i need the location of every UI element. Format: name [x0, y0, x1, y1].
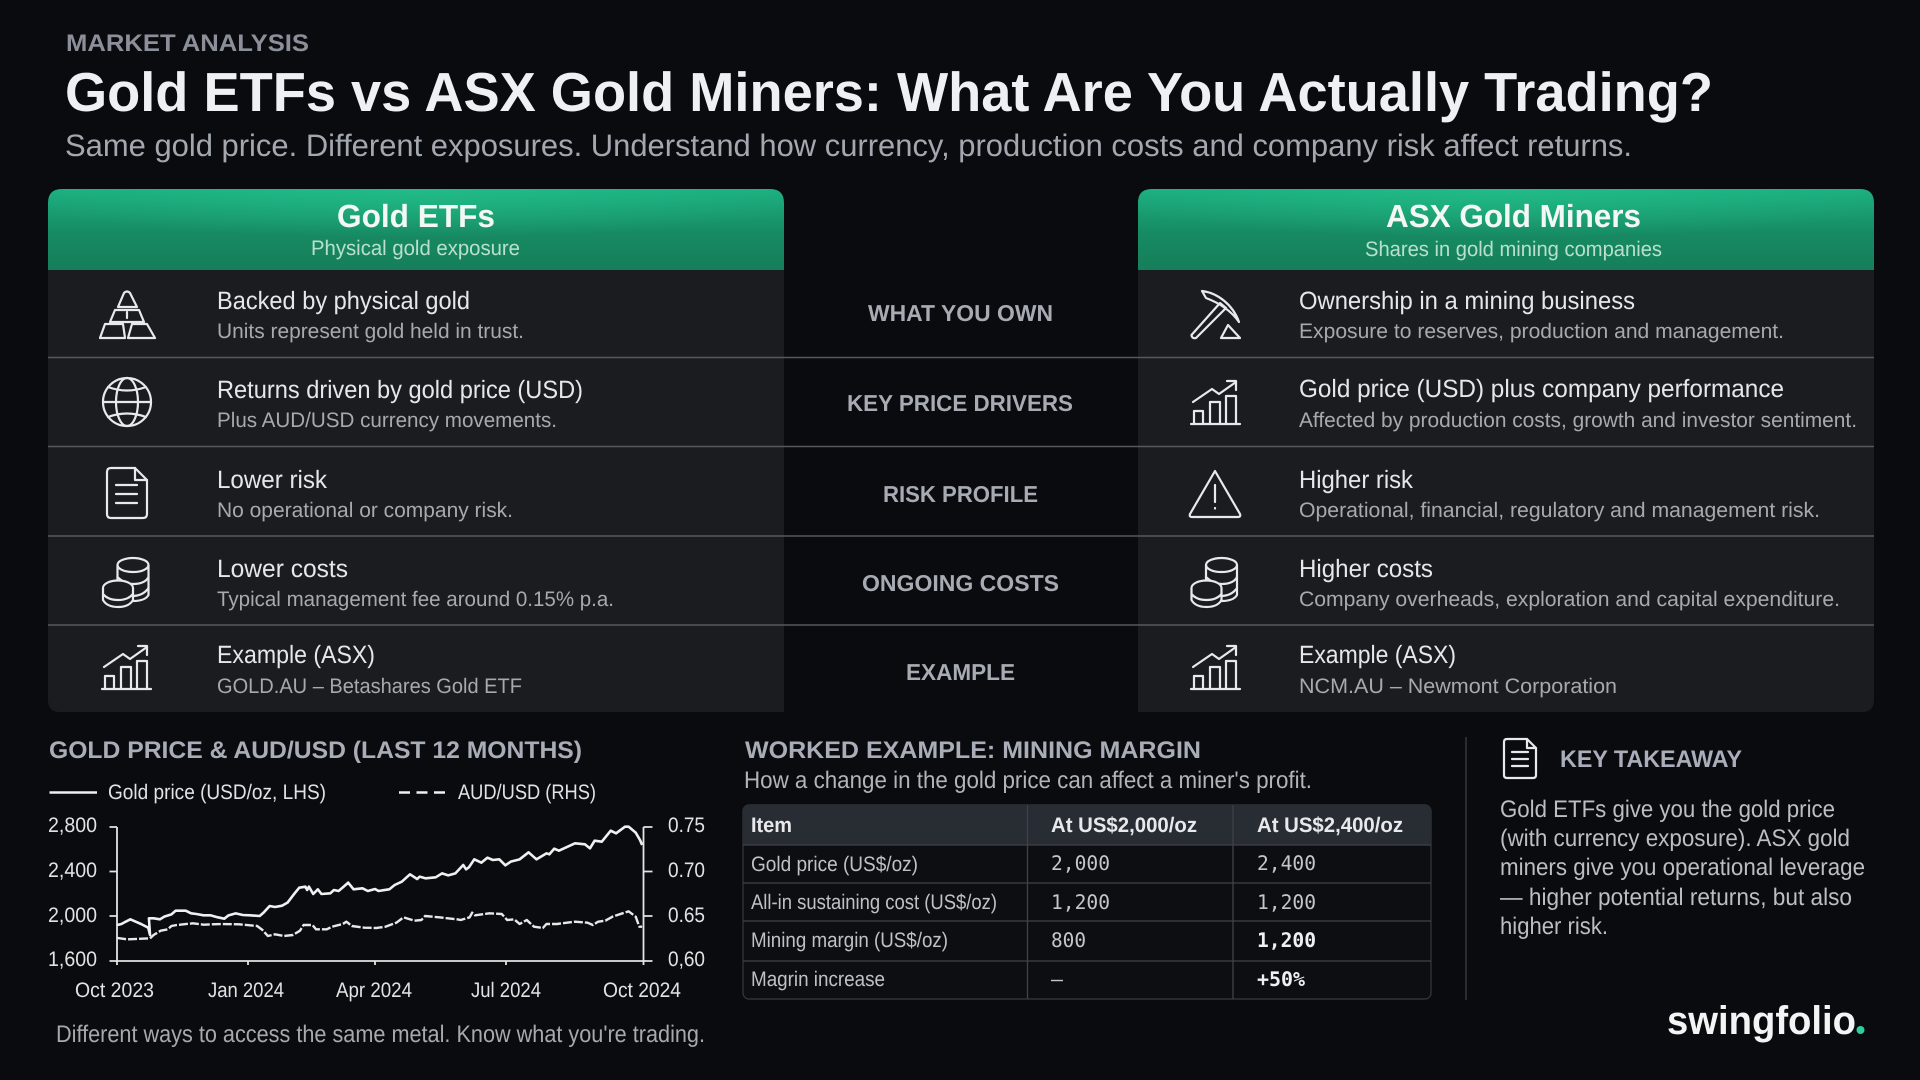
- icon: warning triangle: [1190, 471, 1240, 517]
- row: higher costs: Company overheads, exploration and capital expenditure.: [1299, 588, 1840, 611]
- table row: all-in sustaining cost: 1,200: [1051, 890, 1110, 914]
- panel background: asx miners rows: [1138, 270, 1874, 712]
- table row: all-in sustaining cost: 1,200: [1257, 890, 1316, 914]
- panel: gold etfs: [48, 189, 784, 712]
- icon: pickaxe: [1192, 291, 1240, 338]
- row: example ncm.au: NCM.AU – Newmont Corporation: [1299, 675, 1617, 698]
- table row: gold price: 2,400: [1257, 851, 1316, 875]
- section: worked example: [743, 737, 1431, 999]
- row: returns driven by gold price: Plus AUD/USD currency movements.: [217, 409, 557, 432]
- row: gold price plus company performance: Gold price (USD) plus company performance: [1299, 375, 1784, 403]
- panel background: gold etfs rows: [48, 270, 784, 712]
- row: returns driven by gold price: Returns driven by gold price (USD): [217, 376, 583, 404]
- row: higher risk: Operational, financial, regulatory and management risk.: [1299, 499, 1820, 522]
- comparison category labels: WHAT YOU OWN: [868, 300, 1053, 326]
- takeaway body: miners give you operational leverage: [1500, 854, 1865, 881]
- chart legend: AUD/USD (RHS): [458, 781, 596, 804]
- section: gold price chart: [48, 737, 705, 1002]
- row: lower risk: No operational or company risk.: [217, 499, 513, 522]
- table row: mining margin: Mining margin (US$/oz): [751, 929, 948, 952]
- axis labels left: 1,600: [48, 948, 97, 971]
- icon: growth chart: [1191, 646, 1240, 689]
- table row: gold price: Gold price (US$/oz): [751, 853, 918, 876]
- chart legend: Gold price (USD/oz, LHS): [108, 781, 326, 804]
- takeaway body: (with currency exposure). ASX gold: [1500, 825, 1850, 852]
- row: backed by physical gold: Backed by physical gold: [217, 287, 470, 315]
- row: example ncm.au: Example (ASX): [1299, 641, 1456, 669]
- table row: margin increase: [751, 967, 1305, 991]
- header: asx gold miners: Shares in gold mining companies: [1365, 238, 1662, 261]
- row: example gold.au: [102, 641, 522, 698]
- chart axes: [110, 827, 652, 965]
- table: mining margin: [743, 805, 1431, 999]
- logo: swingfolio: swingfolio: [1667, 999, 1856, 1043]
- row: lower risk: [107, 466, 513, 522]
- row: ownership in a mining business: [1192, 287, 1784, 343]
- axis labels bottom: Jan 2024: [208, 979, 284, 1002]
- row: higher risk: Higher risk: [1299, 466, 1413, 494]
- worked example subtitle: How a change in the gold price can affect a miner's profit.: [744, 767, 1312, 794]
- table row: mining margin: 800: [1051, 928, 1086, 952]
- icon: gold bars: [100, 292, 155, 338]
- icon: growth chart: [1191, 381, 1240, 424]
- caption: Different ways to access the same metal. Know what you're trading.: [56, 1021, 705, 1048]
- table row: gold price: 2,000: [1051, 851, 1110, 875]
- header: asx gold miners: [1138, 189, 1874, 270]
- icon: document: [1504, 739, 1536, 778]
- row: higher costs: Higher costs: [1299, 555, 1433, 583]
- comparison category labels: ONGOING COSTS: [862, 570, 1059, 596]
- icon: coin stack: [1192, 558, 1237, 607]
- chart heading: GOLD PRICE & AUD/USD (LAST 12 MONTHS): [49, 737, 582, 764]
- panel: asx gold miners: [1138, 189, 1874, 712]
- comparison category labels: [847, 300, 1073, 685]
- table row: margin increase: Magrin increase: [751, 968, 885, 991]
- icon: document: [107, 468, 147, 518]
- chart legend: [50, 781, 596, 804]
- header: gold etfs: Physical gold exposure: [311, 237, 520, 260]
- row: lower costs: Lower costs: [217, 555, 348, 583]
- table row: all-in sustaining cost: [751, 890, 1316, 914]
- table row: all-in sustaining cost: All-in sustaining cost (US$/oz): [751, 891, 997, 914]
- comparison category labels: RISK PROFILE: [883, 481, 1038, 507]
- table row: gold price: [751, 851, 1316, 876]
- takeaway body: higher risk.: [1500, 913, 1608, 940]
- title: Gold ETFs vs ASX Gold Miners: What Are You Actually Trading?: [65, 61, 1713, 123]
- axis labels left: 2,400: [48, 859, 97, 882]
- row: lower costs: Typical management fee around 0.15% p.a.: [217, 588, 614, 611]
- row: returns driven by gold price: [103, 376, 583, 432]
- table header row: Item: [751, 814, 792, 837]
- axis labels left: [48, 814, 97, 971]
- comparison category labels: EXAMPLE: [906, 659, 1015, 685]
- table header row: At US$2,400/oz: [1257, 814, 1403, 837]
- header: gold etfs: [48, 189, 784, 270]
- table row: margin increase: –: [1051, 967, 1064, 991]
- callout: key takeaway: [1500, 739, 1865, 940]
- takeaway heading: KEY TAKEAWAY: [1560, 746, 1742, 773]
- takeaway body: Gold ETFs give you the gold price: [1500, 796, 1835, 823]
- axis labels bottom: Oct 2024: [603, 979, 681, 1002]
- row: example gold.au: GOLD.AU – Betashares Gold ETF: [217, 675, 522, 698]
- icon: growth chart: [102, 646, 151, 689]
- row: example gold.au: Example (ASX): [217, 641, 375, 669]
- axis labels left: 2,800: [48, 814, 97, 837]
- axis labels right: 0.70: [668, 859, 705, 882]
- axis labels bottom: Apr 2024: [336, 979, 412, 1002]
- table row: mining margin: [751, 928, 1316, 952]
- row: higher risk: [1190, 466, 1820, 522]
- row: backed by physical gold: Units represent gold held in trust.: [217, 320, 524, 343]
- table header row: [751, 814, 1403, 837]
- takeaway body: — higher potential returns, but also: [1500, 884, 1852, 911]
- comparison category labels: KEY PRICE DRIVERS: [847, 390, 1073, 416]
- subtitle: Same gold price. Different exposures. Understand how currency, production costs and company risk affect returns.: [65, 128, 1632, 163]
- table row: margin increase: +50%: [1257, 967, 1305, 991]
- row: backed by physical gold: [100, 287, 524, 343]
- axis labels right: [668, 814, 705, 971]
- line: gold price: [117, 827, 642, 935]
- row: ownership in a mining business: Exposure to reserves, production and management.: [1299, 320, 1784, 343]
- table row: mining margin: 1,200: [1257, 928, 1316, 952]
- axis labels right: 0.65: [668, 904, 705, 927]
- header: asx gold miners: ASX Gold Miners: [1386, 198, 1641, 234]
- line: aud/usd: [117, 911, 642, 939]
- worked example heading: WORKED EXAMPLE: MINING MARGIN: [745, 737, 1201, 764]
- axis labels right: 0,60: [668, 948, 705, 971]
- eyebrow: market analysis: MARKET ANALYSIS: [66, 30, 309, 57]
- row: example ncm.au: [1191, 641, 1617, 698]
- axis labels bottom: [75, 979, 681, 1002]
- axis labels bottom: Jul 2024: [471, 979, 541, 1002]
- row: ownership in a mining business: Ownership in a mining business: [1299, 287, 1635, 315]
- axis labels right: 0.75: [668, 814, 705, 837]
- icon: globe: [103, 378, 151, 426]
- row: lower risk: Lower risk: [217, 466, 327, 494]
- axis labels bottom: Oct 2023: [75, 979, 154, 1002]
- row: lower costs: [103, 555, 614, 611]
- takeaway body: [1500, 796, 1865, 940]
- axis labels left: 2,000: [48, 904, 97, 927]
- header: gold etfs: Gold ETFs: [337, 198, 495, 234]
- table header row: At US$2,000/oz: [1051, 814, 1197, 837]
- row: higher costs: [1192, 555, 1840, 611]
- row: gold price plus company performance: [1191, 375, 1857, 432]
- row: gold price plus company performance: Affected by production costs, growth and investor sentiment.: [1299, 409, 1857, 432]
- icon: coin stack: [103, 558, 148, 607]
